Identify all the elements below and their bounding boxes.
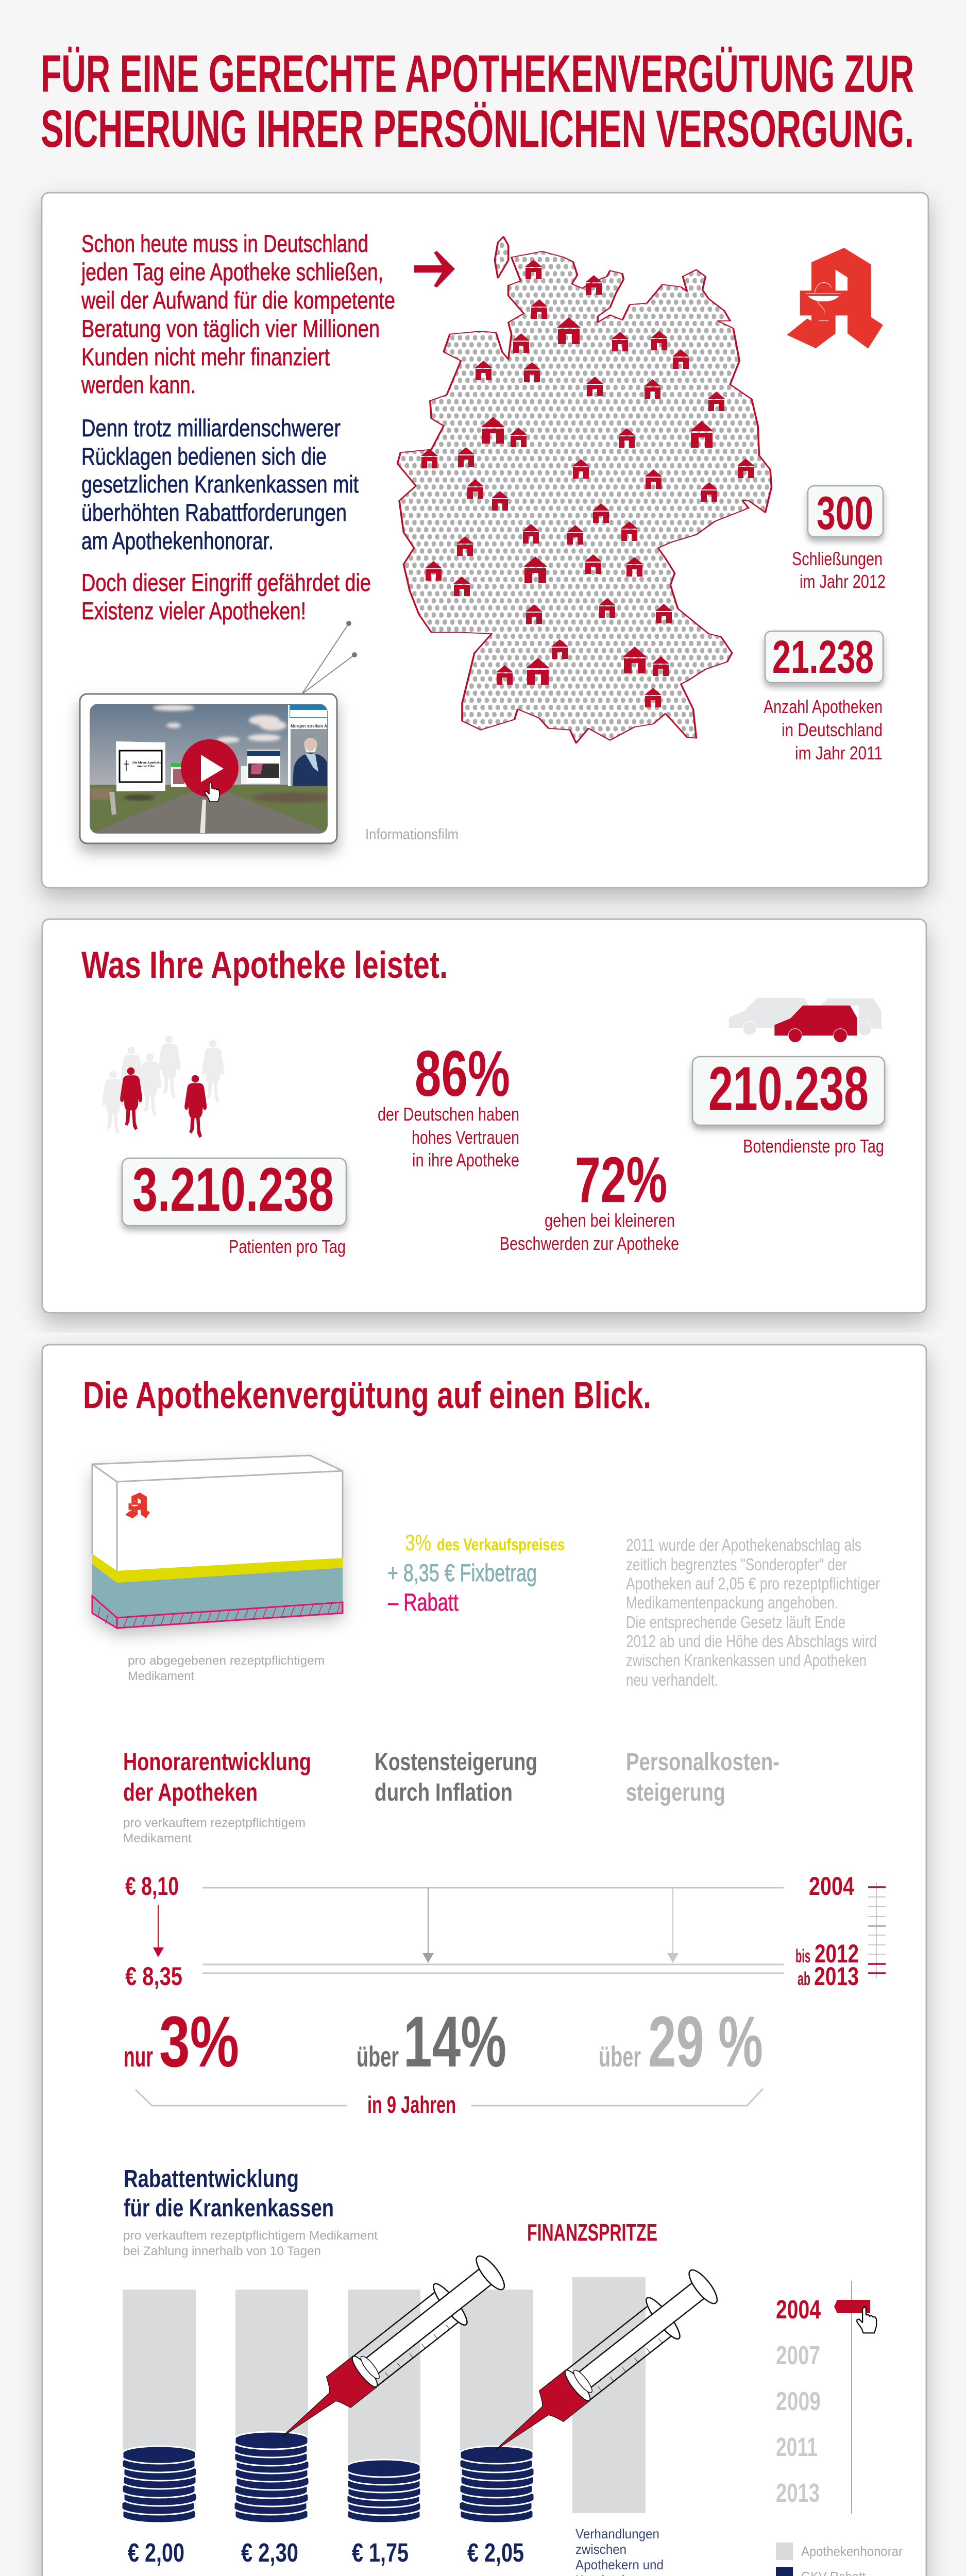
text block: Eingriff: Doch dieser Eingriff gefährdet die <box>81 569 371 596</box>
icon: people <box>102 1036 224 1138</box>
stat: 72 percent: Beschwerden zur Apotheke <box>500 1233 679 1254</box>
stat: 3.210.238 Patienten: 3.210.238 <box>132 1155 334 1224</box>
text block: Sonderopfer <box>626 1535 880 1689</box>
label: Finanzspritze: FINANZSPRITZE <box>527 2219 657 2246</box>
text block: Schließungen <box>80 230 395 398</box>
stat: 210.238 Botendienste: Botendienste pro Tag <box>743 1136 884 1157</box>
text block: Sonderopfer: 2011 wurde der Apothekenabschlag als <box>626 1535 861 1554</box>
text block: Schließungen: werden kann. <box>81 371 196 398</box>
price formula: 3% <box>405 1530 431 1555</box>
text block: Rücklagen: Rücklagen bedienen sich die <box>81 443 327 470</box>
stats: percentage comparison: 29 % <box>648 2001 763 2082</box>
chart: rebate bars with coin stacks: € 2,30 <box>241 2538 298 2567</box>
illustration: medicine box: Medikament <box>128 1669 194 1683</box>
video player: Informationsfilm: Morgen streiken A <box>291 724 327 728</box>
heading: Rabattentwicklung: für die Krankenkassen <box>124 2195 334 2222</box>
text block: Schließungen: jeden Tag eine Apotheke schließen, <box>80 258 383 285</box>
text block: Sonderopfer: 2012 ab und die Höhe des Abschlags wird <box>626 1632 877 1651</box>
text block: Sonderopfer: neu verhandelt. <box>626 1670 718 1689</box>
heading: Was Ihre Apotheke leistet. <box>81 944 448 986</box>
stat: 3.210.238 Patienten: Patienten pro Tag <box>229 1236 346 1257</box>
stat: 86 percent <box>378 1038 519 1171</box>
text block: Rücklagen: gesetzlichen Krankenkassen mit <box>81 470 359 498</box>
price formula <box>387 1530 565 1616</box>
stat: 72 percent <box>500 1144 679 1254</box>
video player: Informationsfilm: Informationsfilm <box>365 826 459 843</box>
text block: Schließungen: Schon heute muss in Deutschland <box>81 230 368 257</box>
stat: 72 percent: gehen bei kleineren <box>545 1210 675 1231</box>
text block: Eingriff: Existenz vieler Apotheken! <box>81 597 306 624</box>
title <box>41 44 914 158</box>
heading: Rabattentwicklung: Rabattentwicklung <box>124 2165 299 2193</box>
stat: 86 percent: 86% <box>415 1038 510 1110</box>
chart: honorarium development: ab <box>798 1968 810 1989</box>
column headings: pro verkauftem rezeptpflichtigem <box>123 1816 306 1830</box>
text block: Sonderopfer: zwischen Krankenkassen und Apotheken <box>626 1651 867 1670</box>
stat: 300 Schließungen <box>792 486 886 592</box>
stat: 21.238 Apotheken: im Jahr 2011 <box>795 742 883 764</box>
stat: 210.238 Botendienste: 210.238 <box>708 1054 869 1123</box>
heading: Rabattentwicklung: pro verkauftem rezeptpflichtigem Medikament <box>123 2229 378 2243</box>
illustration: medicine box <box>92 1455 343 1683</box>
year selector: 2013 <box>776 2478 820 2507</box>
column headings <box>123 1749 779 1845</box>
video player: Informationsfilm: Die kleine Apotheke <box>132 761 161 765</box>
video player: Informationsfilm: um die Ecke <box>137 765 155 768</box>
text block: Rücklagen: überhöhten Rabattforderungen <box>81 499 347 526</box>
logo: Apotheke A <box>787 248 883 349</box>
chart: rebate bars with coin stacks: € 2,00 <box>128 2538 184 2567</box>
stat: 72 percent: 72% <box>575 1144 667 1216</box>
stat: 300 Schließungen: 300 <box>817 487 873 539</box>
stat: 21.238 Apotheken: 21.238 <box>772 632 874 683</box>
text block: Schließungen: Beratung von täglich vier Millionen <box>81 315 380 342</box>
map: Germany with pharmacies <box>392 232 778 747</box>
legend: Apothekenhonorar <box>801 2544 903 2559</box>
stat: 86 percent: der Deutschen haben <box>378 1104 519 1125</box>
stats: percentage comparison: über <box>357 2040 399 2073</box>
chart: honorarium development: bis <box>795 1945 810 1967</box>
panel: Die Apothekenvergütung auf einen Blick <box>42 1345 926 2576</box>
chart: rebate bars with coin stacks <box>122 2277 664 2576</box>
text block: Schließungen: Kunden nicht mehr finanziert <box>81 343 330 370</box>
text block: Sonderopfer: Apotheken auf 2,05 € pro rezeptpflichtiger <box>626 1574 880 1593</box>
stat: 21.238 Apotheken <box>764 631 883 764</box>
stats: percentage comparison: 3% <box>159 2001 239 2082</box>
stats: percentage comparison: über <box>599 2040 641 2073</box>
stats: percentage comparison: 14% <box>403 2001 506 2082</box>
panel: Apothekensterben in Deutschland <box>42 193 928 888</box>
chart: honorarium development <box>125 1872 886 1991</box>
illustration: medicine box: pro abgegebenen rezeptpflichtigem <box>128 1654 325 1668</box>
text block: Schließungen: weil der Aufwand für die kompetente <box>81 286 395 314</box>
price formula: des Verkaufspreises <box>437 1535 565 1554</box>
icon: syringe two <box>479 2262 725 2471</box>
text block: Eingriff <box>81 569 371 624</box>
chart: honorarium development: € 8,10 <box>125 1872 179 1901</box>
column headings: Honorarentwicklung <box>123 1749 311 1776</box>
arrow: to the map <box>414 251 455 287</box>
icon: delivery cars <box>729 998 882 1042</box>
column headings: Personalkosten- <box>626 1749 779 1776</box>
text block: Rücklagen: am Apothekenhonorar. <box>81 527 274 554</box>
column headings: der Apotheken <box>123 1779 258 1806</box>
column headings: durch Inflation <box>375 1779 513 1806</box>
stat: 210.238 Botendienste <box>692 1054 885 1157</box>
chart: honorarium development: 2013 <box>814 1962 859 1991</box>
video player: Informationsfilm <box>80 621 459 843</box>
heading: Rabattentwicklung <box>123 2165 378 2258</box>
text block: Sonderopfer: Die entsprechende Gesetz läuft Ende <box>626 1613 845 1632</box>
text block: Rücklagen: Denn trotz milliardenschwerer <box>81 414 341 442</box>
chart: honorarium development: 2012 <box>815 1939 859 1968</box>
year selector: 2004 <box>776 2295 821 2324</box>
column headings: steigerung <box>626 1779 725 1806</box>
stats: percentage comparison <box>124 2001 763 2118</box>
text block: Sonderopfer: zeitlich begrenztes "Sonderopfer" der <box>626 1555 847 1574</box>
chart: rebate bars with coin stacks: zwischen <box>575 2541 626 2557</box>
text block: Rücklagen <box>81 414 359 554</box>
chart: rebate bars with coin stacks: € 2,05 <box>467 2538 524 2567</box>
year selector: 2011 <box>776 2432 818 2462</box>
year selector: 2007 <box>776 2341 820 2370</box>
text block: Sonderopfer: Medikamentenpackung angehoben. <box>626 1593 838 1612</box>
stat: 3.210.238 Patienten <box>122 1155 346 1257</box>
stat: 21.238 Apotheken: in Deutschland <box>782 719 883 740</box>
heading: Die Apothekenvergütung auf einen Blick. <box>83 1375 651 1416</box>
chart: rebate bars with coin stacks: € 1,75 <box>352 2538 409 2567</box>
chart: honorarium development: € 8,35 <box>125 1962 182 1991</box>
year selector <box>776 2281 876 2514</box>
chart: rebate bars with coin stacks: Apothekern und <box>575 2557 664 2572</box>
stat: 300 Schließungen: Schließungen <box>792 548 883 569</box>
stat: 86 percent: hohes Vertrauen <box>412 1127 519 1148</box>
legend <box>776 2543 903 2576</box>
heading: Rabattentwicklung: bei Zahlung innerhalb von 10 Tagen <box>123 2244 321 2258</box>
stats: percentage comparison: in 9 Jahren <box>367 2091 456 2118</box>
column headings: Kostensteigerung <box>375 1749 537 1776</box>
chart: honorarium development: 2004 <box>809 1872 854 1901</box>
stat: 21.238 Apotheken: Anzahl Apotheken <box>764 696 883 717</box>
stat: 86 percent: in ihre Apotheke <box>412 1149 519 1171</box>
chart: rebate bars with coin stacks: Verhandlungen <box>575 2526 659 2541</box>
stat: 300 Schließungen: im Jahr 2012 <box>800 571 886 592</box>
column headings: Medikament <box>123 1832 192 1845</box>
year selector: 2009 <box>776 2386 821 2416</box>
panel: Was Ihre Apotheke leistet <box>42 919 926 1313</box>
stats: percentage comparison: nur <box>124 2040 153 2073</box>
price formula: + 8,35 € Fixbetrag <box>387 1559 537 1586</box>
icon: syringe one <box>266 2248 512 2457</box>
price formula: – Rabatt <box>388 1588 459 1616</box>
